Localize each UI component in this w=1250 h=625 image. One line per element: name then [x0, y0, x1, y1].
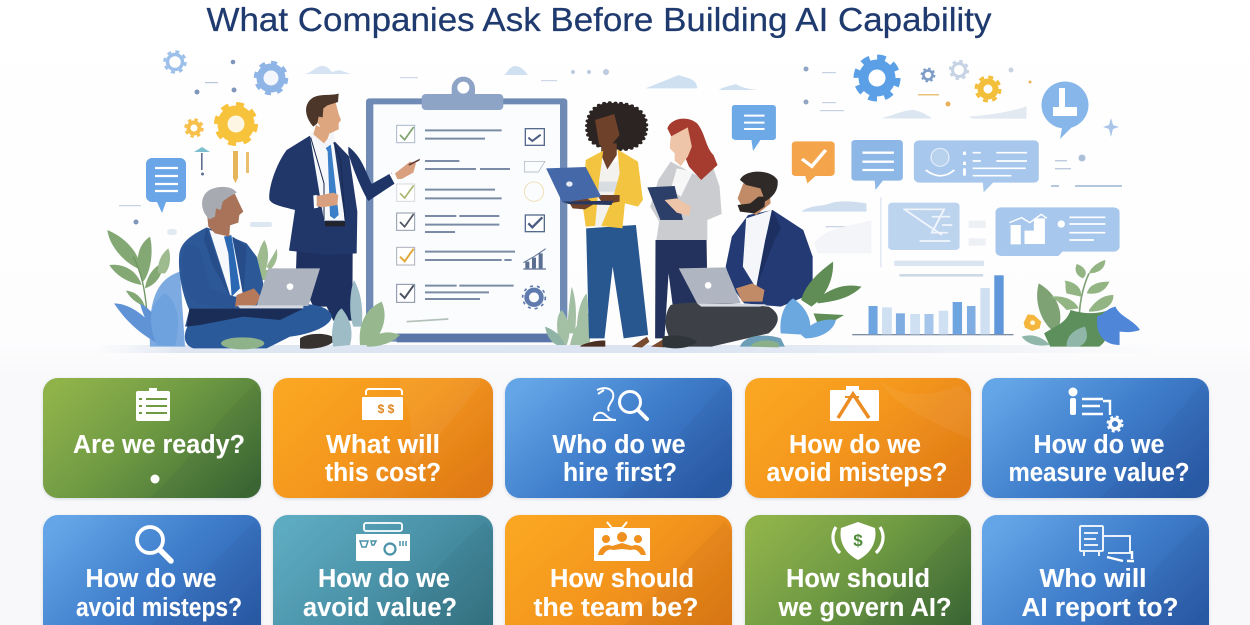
face: [738, 180, 771, 215]
question text: [303, 565, 457, 622]
shoe: [662, 335, 697, 348]
lapel: [756, 210, 781, 287]
profile card bubble: [914, 140, 1039, 192]
grey hair: [202, 187, 237, 219]
cuff: [313, 173, 398, 208]
card: Who do we hire first?: [505, 378, 732, 498]
question text: [778, 565, 952, 622]
shoes: [632, 337, 664, 347]
jacket: [726, 210, 813, 307]
icon: warning card: [830, 386, 879, 421]
icon: shield with dollar: $: [853, 531, 863, 550]
arms and hands: [569, 195, 620, 209]
plant behind seated man: [107, 230, 287, 310]
question text: [325, 431, 441, 487]
card: How do we measure value?: [982, 378, 1209, 498]
icon: pale gear: [950, 61, 968, 79]
icon: small blue gear: [922, 68, 934, 82]
shirt: [209, 230, 244, 297]
hero illustration: [95, 52, 1165, 353]
card: How do we avoid misteps? (second row): [43, 515, 261, 625]
question text: the team be?: [534, 594, 698, 622]
question text: What will: [326, 431, 440, 459]
question text: How do we: [86, 565, 216, 593]
red hair: [667, 119, 718, 180]
seated man: [179, 187, 335, 349]
question text: AI report to?: [1022, 594, 1178, 622]
right side gears and marks: [571, 58, 1122, 187]
clipboard sheet: [373, 104, 560, 334]
tablet: [647, 186, 683, 220]
icon: small yellow gear: [186, 120, 202, 136]
shoes: [580, 338, 649, 347]
tie: [224, 235, 240, 297]
icon: person and magnifier: [594, 388, 647, 420]
lapels: [204, 227, 247, 297]
question text: How do we: [318, 565, 450, 593]
plant at seated man: [740, 262, 862, 347]
question text: measure value?: [1008, 459, 1190, 487]
question text: [552, 431, 686, 487]
card: Who will AI report to?: [982, 515, 1209, 625]
card: Are we ready?: [43, 378, 261, 498]
head: [207, 193, 243, 237]
question text: [534, 565, 698, 622]
icon: cash box: $ $: [378, 402, 395, 416]
question text: [766, 431, 948, 487]
question text: Are we ready?: [73, 431, 245, 459]
blue trousers: [586, 225, 648, 338]
diagram card: [888, 203, 960, 250]
icon: large blue gear: [856, 58, 898, 98]
question text: How should: [786, 565, 930, 593]
neck and head: [313, 100, 341, 143]
plant base near second group: [545, 287, 590, 345]
icon: cash box: [362, 389, 403, 420]
jacket: [269, 136, 357, 255]
question text: How should: [550, 565, 694, 593]
question text: [76, 565, 242, 622]
collar: [309, 127, 335, 149]
question text: avoid value?: [303, 594, 457, 622]
icon: alert marks: [194, 147, 249, 183]
pointing arm: [348, 147, 395, 201]
laptop: [546, 167, 601, 203]
standing man: [269, 93, 420, 321]
arm to keyboard: [182, 245, 240, 308]
plant on the right: [1022, 260, 1140, 347]
small yellow flower: [1024, 314, 1041, 331]
question text: avoid misteps?: [766, 459, 948, 487]
card: How should the team be?: [505, 515, 732, 625]
question text: avoid misteps?: [76, 594, 242, 622]
tie: [324, 144, 339, 219]
card: How should we govern AI?: [745, 515, 971, 625]
seated bearded man: [662, 172, 813, 348]
laptop: [257, 268, 320, 306]
laptop: [679, 267, 741, 303]
icon: pale blue gear: [164, 52, 186, 72]
icon: shield with dollar: [833, 522, 883, 560]
pen: [408, 159, 420, 166]
hands and belt: [317, 162, 416, 207]
scattered right dots: [571, 66, 1122, 187]
lap shadow: [187, 309, 303, 327]
hair fill: [587, 103, 646, 150]
pale clouds and marks: [645, 75, 1027, 119]
chat bubble: [732, 105, 776, 151]
question text: [1008, 431, 1190, 487]
hair: [740, 172, 778, 201]
yellow blazer: [583, 149, 643, 228]
illustration right group: three colleagues and charts: [546, 75, 1140, 348]
card: How do we avoid value?: [273, 515, 493, 625]
icon: left chat bubble: [146, 158, 186, 213]
hand: [664, 198, 691, 216]
question text: [1022, 565, 1178, 622]
icon: team picture: [594, 522, 650, 561]
orange check bubble: [792, 141, 835, 183]
icon: yellow gear: [976, 77, 1000, 101]
trousers: [665, 302, 778, 347]
small dot: [150, 474, 160, 484]
checklist right icons: [523, 129, 546, 309]
neck and face: [595, 114, 620, 169]
icon: value box: [356, 523, 410, 561]
question text: Who do we: [552, 431, 686, 459]
legs: [296, 250, 353, 321]
illustration left group: clipboard and two men: [107, 77, 590, 349]
hair: [306, 93, 339, 127]
shirt: [743, 210, 772, 288]
document bubble: [851, 140, 903, 190]
white shirt: [671, 168, 693, 197]
card: How do we avoid misteps?: [745, 378, 971, 498]
clipboard clip: [422, 77, 503, 110]
navy trousers: [655, 240, 708, 338]
question text: Who will: [1040, 565, 1146, 593]
grey blazer: [650, 162, 722, 240]
white top: [595, 162, 622, 227]
clipboard base: [397, 334, 567, 342]
sparkle: [1103, 118, 1119, 137]
shoe and pot: [300, 334, 335, 349]
lapel shadow: [311, 137, 345, 220]
icon: blue gear: [256, 62, 286, 94]
face: [670, 127, 692, 166]
body jacket: [179, 227, 263, 327]
question text: How do we: [1034, 431, 1164, 459]
beard: [738, 197, 765, 213]
hand: [736, 283, 764, 302]
icon: big yellow gear: [216, 104, 256, 144]
icon: thumbs bubble: [1042, 82, 1088, 139]
blue leaves and seat: [114, 272, 185, 347]
crossed legs: [185, 304, 332, 348]
standing woman with laptop: [546, 103, 649, 347]
icon: list and gear: [1068, 388, 1122, 432]
icon: documents and device: [1080, 526, 1134, 561]
faint ui lines: [801, 197, 986, 277]
scattered left dots and marks: [119, 60, 557, 235]
white shirt: [310, 136, 345, 221]
question text: hire first?: [563, 459, 677, 487]
icon: magnifier: [137, 527, 171, 561]
front plant at clipboard: [332, 280, 400, 347]
chart card: [995, 207, 1120, 256]
checklist rows: [397, 125, 515, 322]
question text: this cost?: [325, 459, 441, 487]
title: What Companies Ask Before Building AI Capability: [206, 1, 992, 38]
curly hair: [587, 103, 646, 150]
ground shadow: [95, 345, 1165, 353]
question text: we govern AI?: [778, 594, 952, 622]
bar chart: [852, 275, 1013, 335]
standing woman with tablet: [632, 119, 722, 347]
icon: clipboard list: [136, 388, 170, 421]
card: What will this cost?: [273, 378, 493, 498]
clipboard frame: [366, 98, 567, 342]
question text: How do we: [789, 431, 921, 459]
